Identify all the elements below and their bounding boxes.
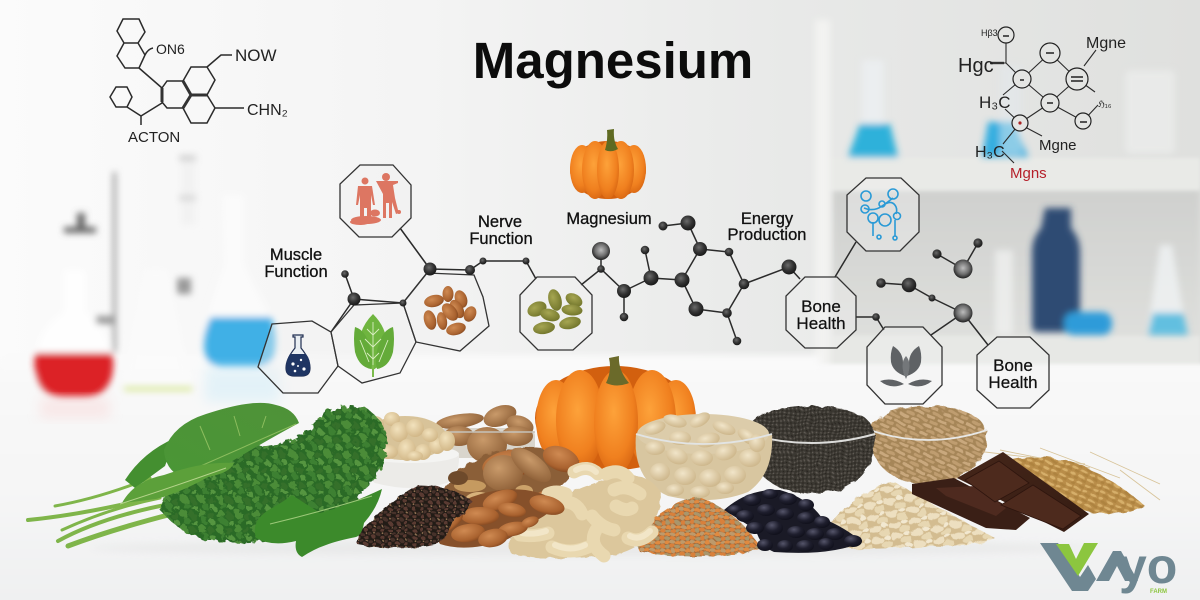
chemical structure: top right: Mgne (1039, 137, 1077, 154)
food: peanuts in glass bowl (636, 409, 772, 500)
icon: flask (286, 335, 310, 376)
title: Magnesium (473, 32, 753, 89)
food: chocolate (912, 452, 1089, 532)
icon: blue molecule (861, 189, 900, 240)
octagon: bone health 1 (786, 277, 856, 348)
octagon: blue molecule (847, 178, 919, 251)
label: energy production: Energy (741, 210, 794, 228)
food: almonds pile (434, 485, 567, 550)
octagon: red body figures (340, 165, 411, 237)
label: energy production: Production (728, 226, 806, 244)
blurred shelf glass (848, 60, 1188, 335)
food: walnuts in glass bowl (435, 401, 536, 463)
food: dark quinoa (356, 485, 472, 549)
food: black beans (724, 489, 862, 553)
icon: green leaf (354, 314, 394, 377)
logo: Vayo Farm (1040, 538, 1177, 595)
label: magnesium: Magnesium (566, 210, 652, 228)
food: spinach stems (28, 478, 175, 546)
label: nerve function: Nerve (478, 213, 522, 231)
label: nerve function (469, 213, 533, 248)
chemical structure: top right: ℌ₁₆ (1098, 99, 1112, 109)
food: lentils (637, 497, 760, 556)
chemical structure: top right: Mgne (1086, 35, 1126, 52)
icon: human figures (350, 173, 401, 225)
label: muscle function: Function (264, 263, 328, 281)
icon: gray leaves (880, 346, 932, 386)
chemical structure: top right: Mgns (1010, 165, 1047, 182)
octagon: bone health 2 (977, 337, 1049, 408)
food: kale (160, 406, 386, 543)
food shadow (90, 540, 1090, 556)
chemical structure: top left: ACTON (128, 129, 180, 146)
label: muscle function (264, 246, 328, 281)
octagon: bone health 2: Bone (993, 356, 1033, 375)
food: spinach leaves (120, 403, 382, 557)
food: cashews (508, 467, 662, 559)
food: chickpeas in white bowl (361, 412, 459, 488)
chemical structure: top right: H₃C (979, 93, 1010, 112)
chemical structure: top left: ON6 (156, 41, 185, 57)
octagon: bone health 1: Bone (801, 297, 841, 316)
label: energy production (728, 210, 806, 244)
molecule network bonds (331, 223, 988, 345)
chemical structure: top left: CHN₂ (247, 102, 288, 119)
octagon: pumpkin seeds (520, 277, 592, 350)
chemical structure: top right: H₃C (975, 144, 1005, 161)
food: wheat (985, 448, 1160, 514)
label: nerve function: Function (469, 230, 533, 248)
hexagon: flask (258, 321, 338, 393)
logo: Vayo Farm: yo (1119, 538, 1177, 594)
food: brown rice bowl (870, 406, 987, 484)
octagon: bone health 1: Health (796, 314, 846, 333)
octagon: gray leaves (867, 327, 942, 404)
food: oats (830, 482, 995, 549)
label: muscle function: Muscle (270, 246, 322, 264)
polygon: almonds (403, 273, 489, 351)
food: chia bowl (748, 406, 875, 494)
chemical structure: top right (958, 27, 1126, 182)
molecule network nodes (341, 216, 983, 345)
chemical structure: top left (110, 19, 288, 146)
icon: almonds (422, 286, 479, 337)
octagon: bone health 2: Health (988, 373, 1038, 392)
food: mixed nuts (442, 441, 583, 512)
blurred left glassware (34, 155, 276, 397)
logo: Vayo Farm: FARM (1150, 589, 1167, 595)
chemical structure: top left: NOW (235, 46, 277, 65)
icon: pumpkin seeds (525, 288, 585, 335)
chemical structure: top right: Hgc (958, 55, 994, 77)
chemical structure: top right: Hβ3 (981, 28, 998, 38)
food: big pumpkin (535, 356, 696, 474)
heptagon: leaf (331, 303, 416, 383)
small pumpkin (570, 129, 646, 199)
